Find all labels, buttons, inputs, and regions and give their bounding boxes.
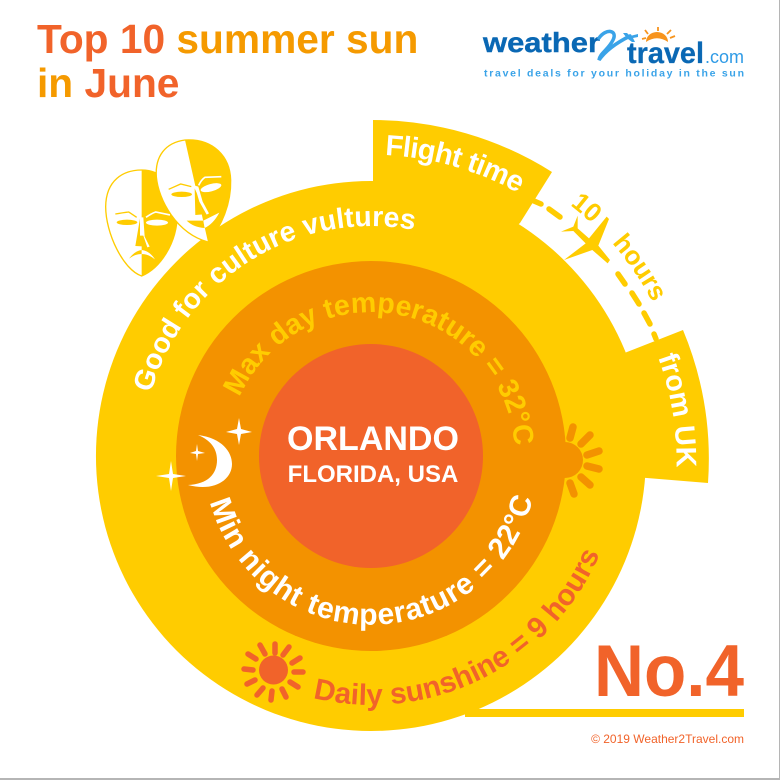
title	[37, 16, 418, 106]
label: hours: hours	[613, 232, 663, 300]
heading: Orlando, Florida USA	[287, 420, 459, 488]
label: daily sunshine: Daily sunshine = 9 hours	[314, 550, 598, 711]
title: in June	[37, 60, 179, 106]
icon: star upper	[226, 418, 252, 445]
logo: weather2travel.com: travel	[627, 37, 704, 70]
panel: orange ring	[176, 261, 566, 651]
label: from UK: from UK	[658, 352, 696, 468]
title: Top 10 summer sun	[37, 16, 418, 62]
icon: half sun on right	[547, 427, 599, 494]
label: min night temperature: Min night temperature = 22°C	[210, 495, 531, 631]
icon: star large	[156, 461, 186, 491]
label: max day temperature: Max day temperature = 32°C	[222, 296, 534, 444]
heading: Orlando, Florida USA: ORLANDO	[287, 420, 459, 458]
panel: central red circle	[259, 344, 483, 568]
label: good for culture vultures: Good for culture vultures	[134, 207, 414, 390]
logo: weather2travel.com: weather	[482, 27, 600, 58]
back mask	[106, 170, 177, 276]
rank number: No.4	[594, 629, 744, 712]
label: 10: 10	[571, 194, 601, 220]
logo: weather2travel.com	[482, 27, 744, 80]
heading: Orlando, Florida USA: FLORIDA, USA	[288, 461, 458, 488]
flight path dashes	[534, 201, 656, 339]
icon: star small	[190, 444, 205, 461]
icon: moon	[188, 435, 232, 487]
base rule	[465, 709, 744, 717]
copyright: © 2019 Weather2Travel.com	[591, 732, 744, 746]
icon: sun	[244, 644, 303, 700]
icon: theatre masks	[106, 140, 231, 276]
logo: weather2travel.com: travel deals for your holiday in the sun	[484, 68, 744, 80]
front mask	[156, 140, 231, 242]
logo: weather2travel.com: .com	[705, 47, 744, 67]
label: flight time: Flight time	[386, 135, 522, 191]
panel: outer yellow ring with flight tabs	[96, 120, 709, 731]
icon: plane	[561, 216, 610, 263]
